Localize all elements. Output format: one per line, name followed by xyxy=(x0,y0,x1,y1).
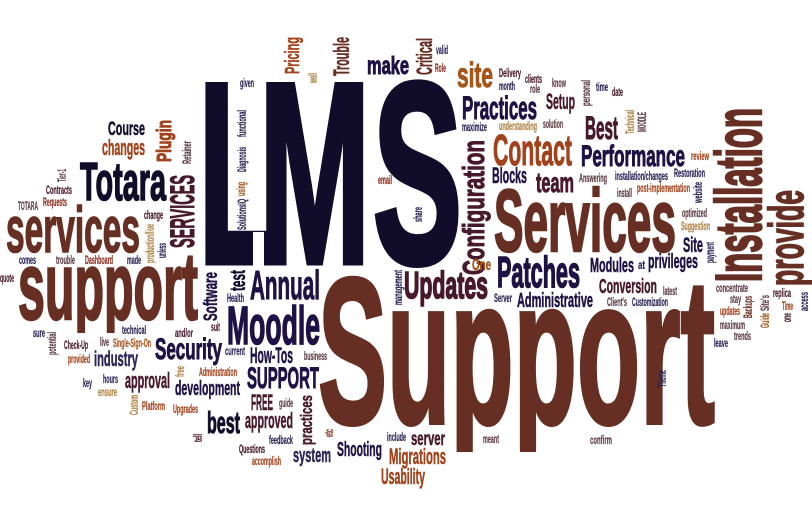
word: Configuration: Configuration xyxy=(456,140,491,275)
word: Shooting: Shooting xyxy=(337,439,382,461)
word: Plugin: Plugin xyxy=(154,120,176,162)
small words: centre cluster: Health xyxy=(227,293,244,305)
small words: centre cluster: well xyxy=(308,73,320,83)
small words: left cluster xyxy=(0,141,194,285)
small words: right cluster: Customization xyxy=(632,297,668,309)
small words: far-right cluster: updates xyxy=(720,306,740,318)
small words: top-right cluster xyxy=(462,68,649,134)
small words: centre cluster: email xyxy=(378,175,392,187)
small words: centre cluster: Role xyxy=(435,63,446,75)
small words: far-right cluster: stay xyxy=(730,294,741,306)
word cloud: Critical xyxy=(412,38,437,75)
small words: left cluster: Contracts xyxy=(46,185,72,197)
small words: left cluster: change xyxy=(144,210,163,222)
small words: far-right cluster: leave xyxy=(714,338,728,350)
small words: right cluster: install xyxy=(617,188,632,200)
small words: far-right cluster: Guide xyxy=(760,313,772,328)
word: Site: Site xyxy=(683,234,703,257)
small words: left cluster: trouble xyxy=(56,255,75,267)
word cloud: Best xyxy=(585,110,618,146)
small words: left cluster: comes xyxy=(19,255,36,267)
word cloud: Setup xyxy=(546,89,575,114)
small words: lower-left cluster: Check-Up xyxy=(64,340,88,352)
word: privileges: privileges xyxy=(648,251,698,273)
small words: lower-left cluster: tell xyxy=(193,434,205,442)
small words: top-right cluster: role xyxy=(530,84,540,96)
small words: left cluster: made xyxy=(127,255,141,267)
small words: lower-left cluster: accomplish xyxy=(252,456,281,468)
word cloud: approval xyxy=(125,368,170,393)
small words: far-right cluster: Time xyxy=(782,301,793,313)
small words: far-right cluster: one xyxy=(782,313,794,322)
small words: left cluster: Requests xyxy=(43,197,67,209)
word: One: One xyxy=(472,257,491,274)
word: Software: Software xyxy=(201,272,222,321)
small words: lower-left cluster: etc xyxy=(324,429,336,437)
small words: right cluster: at xyxy=(638,260,645,272)
word cloud: FREE xyxy=(251,390,273,415)
title word: LMS: LMS xyxy=(198,29,462,318)
small words: lower-left cluster: confirm xyxy=(590,435,612,447)
small words: right cluster: website xyxy=(693,182,705,203)
small words: lower-left cluster: Administration xyxy=(199,367,237,379)
small words: centre cluster: suit xyxy=(211,322,220,334)
word cloud: changes xyxy=(102,135,145,160)
small words: lower-left cluster: feedback xyxy=(269,435,293,447)
small words: right cluster: Client's xyxy=(607,297,627,309)
word cloud: Moodle xyxy=(227,296,320,356)
word cloud: SERVICES xyxy=(164,175,202,248)
small words: right cluster xyxy=(579,151,717,387)
word: Totara: Totara xyxy=(80,152,167,212)
small words: right cluster: Suggestion xyxy=(681,221,710,233)
small words: lower-left cluster: and/or xyxy=(175,328,193,340)
word cloud: Blocks xyxy=(492,163,527,188)
word cloud: How-Tos xyxy=(250,343,293,368)
small words: centre cluster: business xyxy=(304,351,327,363)
small words: centre cluster: SolutionsIQ xyxy=(237,199,249,230)
small words: lower-left cluster: free xyxy=(175,366,187,377)
small words: lower-left cluster: Platform xyxy=(142,401,165,413)
word: Administrative: Administrative xyxy=(517,290,593,312)
word cloud: Patches xyxy=(497,248,580,297)
small words: centre cluster: Server xyxy=(494,293,512,305)
word cloud: SUPPORT xyxy=(247,362,319,395)
word: team: team xyxy=(536,167,574,198)
word: development: development xyxy=(175,378,240,400)
small words: centre cluster: given xyxy=(240,78,254,90)
small words: left cluster: production/live xyxy=(145,224,157,263)
small words: left cluster: Tier-1 xyxy=(57,169,69,182)
small words: left cluster: unless xyxy=(157,243,169,258)
small words: lower-left cluster: include xyxy=(387,432,406,444)
small words: far-right cluster: Site's xyxy=(760,295,772,311)
word: Updates: Updates xyxy=(404,265,488,307)
small words: top-right cluster: time xyxy=(596,82,608,94)
small words: top-right cluster: MOODLE xyxy=(637,112,649,132)
word cloud: approved xyxy=(245,408,293,433)
small words: lower-left cluster: Upgrades xyxy=(173,404,198,416)
word: Annual: Annual xyxy=(250,262,320,308)
small words: top-right cluster: understanding xyxy=(499,121,537,133)
small words: top-right cluster: know xyxy=(552,78,566,90)
small words: far-right cluster: maximum xyxy=(720,320,745,332)
small words: centre cluster: valid xyxy=(436,45,448,57)
small words: centre cluster: Diagnosis xyxy=(237,147,249,172)
small words: right cluster: optimized xyxy=(682,208,707,220)
small words: top-right cluster: month xyxy=(499,81,515,93)
word: industry: industry xyxy=(94,348,138,371)
small words: lower-left cluster: Single-Sign-On xyxy=(113,338,151,350)
word: Security: Security xyxy=(155,333,222,366)
small words: lower-left cluster xyxy=(33,325,612,468)
word: best: best xyxy=(207,405,240,440)
small words: lower-left cluster: technical xyxy=(122,325,146,337)
small words: lower-left cluster: ensure xyxy=(98,387,117,399)
small words: lower-left cluster: meant xyxy=(483,434,499,446)
small words: top-right cluster: clients xyxy=(525,74,542,86)
small words: lower-left cluster: Custom xyxy=(129,395,141,415)
small words: centre cluster: using xyxy=(236,182,248,196)
small words: right cluster: post-implementation xyxy=(637,183,690,195)
small words: centre cluster: share xyxy=(413,207,425,222)
small words: right cluster: Answering xyxy=(579,173,607,185)
word: site: site xyxy=(457,56,493,95)
small words: top-right cluster: date xyxy=(612,87,623,99)
small words: lower-left cluster: potential xyxy=(47,332,59,355)
word: Practices: Practices xyxy=(462,90,537,126)
word: Performance: Performance xyxy=(581,140,685,173)
small words: far-right cluster: access xyxy=(799,292,811,311)
small words: lower-left cluster: guide xyxy=(279,398,293,410)
small words: lower-left cluster: Questions xyxy=(239,444,265,456)
small words: lower-left cluster: key xyxy=(83,378,92,390)
word: Course: Course xyxy=(108,119,145,140)
small words: right cluster: Restoration xyxy=(674,168,705,180)
word: test: test xyxy=(227,270,250,291)
small words: lower-left cluster: hours xyxy=(103,374,118,386)
small words: lower-left cluster: provided xyxy=(68,354,90,366)
word: Modules: Modules xyxy=(590,255,634,277)
small words: left cluster: quote xyxy=(0,273,14,285)
small words: left cluster: Dashboard xyxy=(85,255,113,267)
word cloud: Contact xyxy=(493,126,572,175)
small words: far-right cluster xyxy=(714,283,811,350)
small words: right cluster: Theme xyxy=(657,370,669,387)
small words: top-right cluster: Technical xyxy=(625,110,637,134)
small words: left cluster: Retainer xyxy=(182,141,194,164)
small words: right cluster: latest xyxy=(663,286,677,298)
small words: right cluster: installation/changes xyxy=(615,171,668,183)
small words: right cluster: payment xyxy=(705,242,717,263)
small words: top-right cluster: Delivery xyxy=(499,68,521,80)
small words: lower-left cluster: sure xyxy=(33,328,45,340)
small words: centre cluster: functional xyxy=(237,110,249,137)
word: practices: practices xyxy=(297,395,316,445)
word: services: services xyxy=(6,193,140,266)
small words: top-right cluster: personal xyxy=(581,80,593,106)
word: system: system xyxy=(293,445,331,467)
word cloud: Usability xyxy=(381,464,425,489)
small words: far-right cluster: trends xyxy=(734,331,751,343)
word: Migrations: Migrations xyxy=(389,444,446,469)
word: Pricing: Pricing xyxy=(282,37,304,74)
small words: right cluster: review xyxy=(691,151,709,163)
small words: centre cluster: management xyxy=(393,270,405,305)
small words: far-right cluster: Backups xyxy=(743,296,755,318)
word: Conversion: Conversion xyxy=(599,276,657,298)
small words: lower-left cluster: live xyxy=(100,337,109,349)
word: support: support xyxy=(18,233,198,340)
word: server: server xyxy=(411,429,445,450)
word: make: make xyxy=(367,52,409,80)
small words: centre cluster: current xyxy=(225,346,245,358)
small words: far-right cluster: replica xyxy=(773,288,791,300)
small words: top-right cluster: solution xyxy=(543,119,563,131)
small words: far-right cluster: concentrate xyxy=(716,283,748,295)
small words: top-right cluster: maximize xyxy=(462,122,487,134)
small words: left cluster: TOTARA xyxy=(18,201,38,213)
small words: centre cluster xyxy=(211,45,512,363)
